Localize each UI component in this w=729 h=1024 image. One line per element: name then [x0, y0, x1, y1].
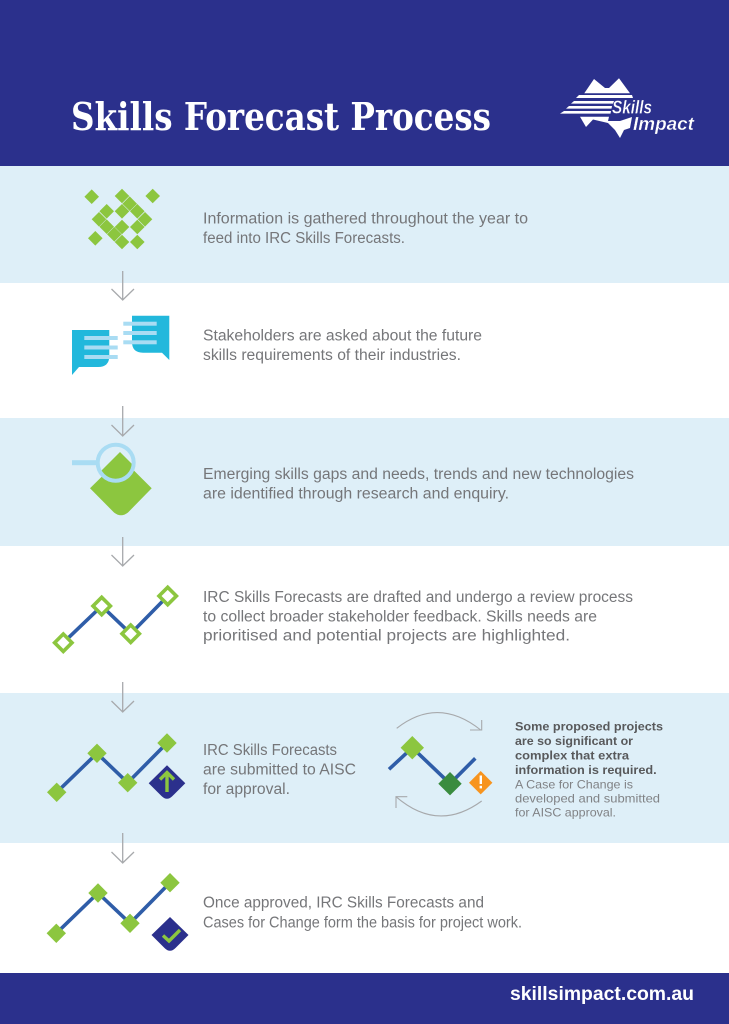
- text: step 3: Emerging skills gaps and needs, trends and new technologies: [203, 466, 634, 483]
- panel: step 2: [72, 316, 482, 375]
- text: step 2: Stakeholders are asked about the future: [203, 328, 482, 344]
- arrow: step 2 to 3: [112, 406, 134, 436]
- arrow: step 4 to 5: [112, 682, 134, 712]
- text: step 4: to collect broader stakeholder feedback. Skills needs are: [203, 609, 597, 626]
- text: step 5: for approval.: [203, 781, 290, 798]
- text: website: skillsimpact.com.au: [510, 984, 694, 1005]
- text: step 1: Information is gathered throughout the year to: [203, 210, 528, 228]
- panel: step 1: [0, 166, 729, 283]
- icon: scattered green diamonds: [84, 189, 160, 249]
- text: case for change note: complex that extra: [515, 748, 629, 762]
- text: case for change note: information is required.: [515, 763, 657, 777]
- text: case for change note: for AISC approval.: [515, 806, 616, 820]
- arrow: step 3 to 4: [112, 537, 134, 566]
- panel: step 5: [0, 693, 729, 843]
- logo: Skills Impact: [560, 78, 695, 138]
- text: step 5: [203, 742, 356, 798]
- text: step 5: are submitted to AISC: [203, 762, 356, 778]
- text: step 6: Cases for Change form the basis for project work.: [203, 914, 522, 932]
- text: case for change note: A Case for Change is: [515, 778, 633, 792]
- text: step 4: [203, 589, 633, 645]
- panel: header: [0, 0, 729, 166]
- text: step 6: [203, 894, 522, 932]
- text: case for change note: [515, 720, 663, 820]
- panel: step 6: [47, 873, 522, 951]
- text: step 4: prioritised and potential projects are highlighted.: [203, 628, 570, 645]
- logo: Skills Impact: Impact: [633, 114, 695, 134]
- text: case for change note: Some proposed projects: [515, 720, 663, 734]
- panel: step 3: [0, 418, 729, 546]
- text: step 1: feed into IRC Skills Forecasts.: [203, 230, 405, 247]
- text: step 3: are identified through research and enquiry.: [203, 486, 509, 502]
- text: step 5: IRC Skills Forecasts: [203, 742, 337, 759]
- icon: case for change cycle: [389, 713, 492, 816]
- text: step 4: IRC Skills Forecasts are drafted and undergo a review process: [203, 589, 633, 606]
- icon: line chart with upload badge: [47, 733, 185, 802]
- text: case for change note: developed and submitted: [515, 792, 660, 806]
- icon: line chart with check badge: [47, 873, 188, 951]
- text: step 1: [203, 210, 528, 247]
- panel: step 4: [55, 587, 633, 651]
- arrow: step 5 to 6: [112, 833, 134, 863]
- text: step 2: skills requirements of their industries.: [203, 347, 461, 364]
- title: Skills Forecast Process: [71, 94, 491, 139]
- logo: Skills Impact: Skills: [612, 97, 652, 117]
- icon: line chart with hollow diamonds: [55, 587, 176, 651]
- icon: speech bubbles: [72, 316, 169, 375]
- text: step 6: Once approved, IRC Skills Forecasts and: [203, 894, 484, 912]
- panel: footer: [0, 973, 729, 1024]
- arrow: step 1 to 2: [112, 271, 134, 300]
- text: case for change note: are so significant or: [515, 734, 633, 748]
- text: step 3: [203, 466, 634, 502]
- icon: magnifier over diamond: [72, 445, 152, 515]
- text: step 2: [203, 328, 482, 364]
